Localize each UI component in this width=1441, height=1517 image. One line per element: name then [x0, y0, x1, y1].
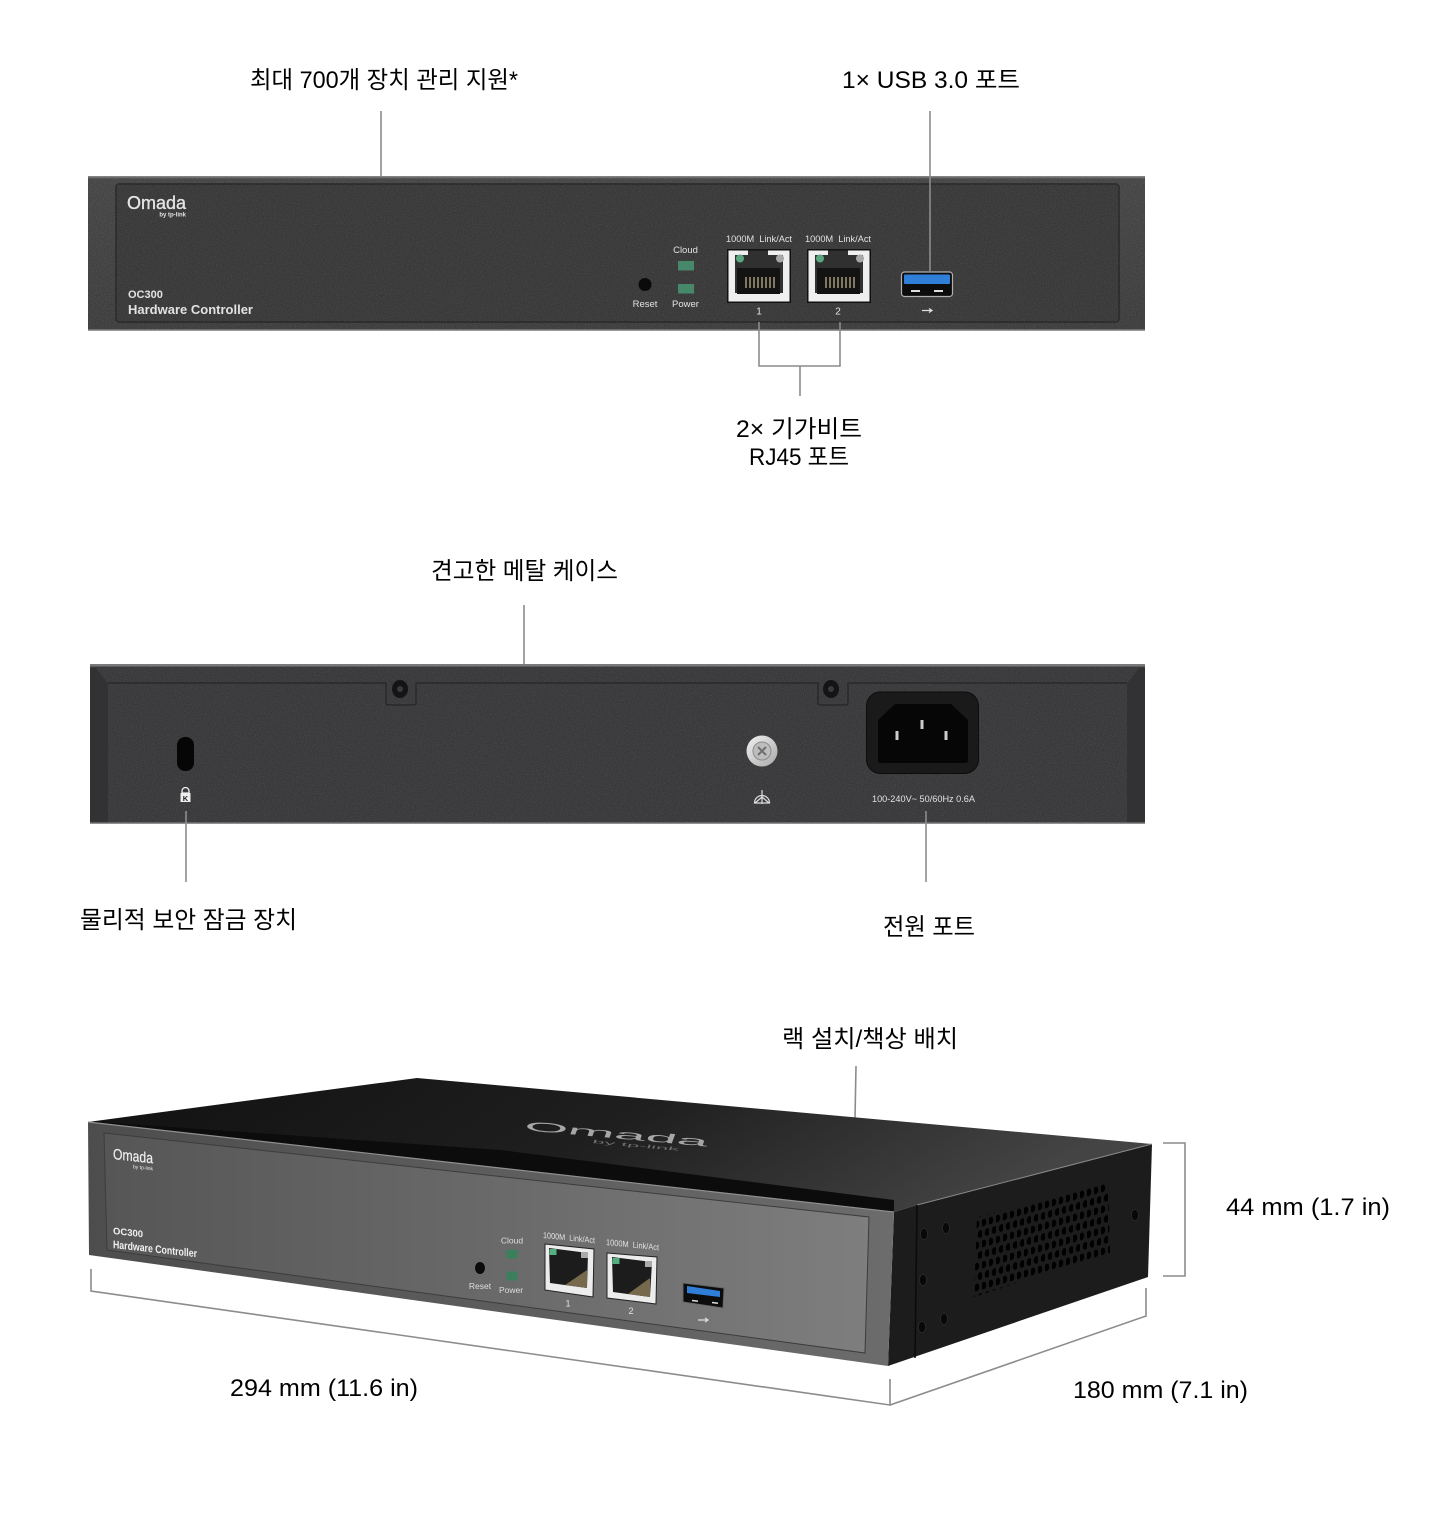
- leader line: power: [925, 811, 927, 882]
- reset button: Reset: [633, 299, 658, 310]
- top logo: by tp-link: [592, 1139, 680, 1152]
- label: gigabit RJ45 ports: [736, 416, 862, 471]
- reset and LEDs: Power: [499, 1285, 523, 1295]
- label: width: 294 mm (11.6 in): [230, 1375, 418, 1402]
- panel: front view device: [88, 176, 1145, 331]
- leader line: device management: [380, 111, 382, 176]
- logo and model text: by tp-link: [133, 1164, 153, 1172]
- logo and model text: Hardware Controller: [113, 1239, 198, 1260]
- label: USB port: 1× USB 3.0 포트: [842, 67, 1020, 94]
- label: gigabit RJ45 ports: 2× 기가비트: [736, 416, 862, 443]
- reset button: [633, 278, 658, 310]
- label: power port: 전원 포트: [883, 914, 975, 941]
- ventilation holes: [974, 1182, 1110, 1297]
- leader line: USB: [929, 111, 931, 271]
- leader line: mount: [855, 1066, 856, 1118]
- screw left: [392, 680, 408, 698]
- panel: rear view device: [90, 664, 1145, 824]
- RJ45 port 2: 1000M Link/Act: [606, 1237, 660, 1252]
- logo and model text: Omada: [113, 1146, 154, 1167]
- RJ45 port 2: 2: [835, 306, 841, 318]
- RJ45 port 2: [805, 234, 871, 318]
- reset and LEDs: Cloud: [501, 1236, 523, 1246]
- security lock slot: K: [183, 794, 189, 803]
- bracket: RJ45 ports: [759, 322, 840, 396]
- label: up to 700 devices: 최대 700개 장치 관리 지원*: [250, 67, 518, 94]
- label: depth: 180 mm (7.1 in): [1073, 1377, 1248, 1404]
- label: rack or desktop mount: 랙 설치/책상 배치: [782, 1026, 958, 1053]
- status LEDs: [672, 245, 699, 310]
- reset and LEDs: [469, 1236, 523, 1295]
- model name: Hardware Controller: [128, 303, 253, 317]
- top logo: Omada: [522, 1118, 711, 1149]
- bracket: width and depth dimension: [91, 1269, 1146, 1405]
- model name: [128, 289, 253, 317]
- status LEDs: Cloud: [673, 245, 698, 256]
- dark trim along front edge: [88, 1122, 894, 1212]
- power socket: [866, 692, 978, 805]
- USB 3.0 port: [902, 272, 952, 312]
- panel: perspective view device: [88, 1078, 1152, 1366]
- USB port: [683, 1283, 724, 1322]
- logo: Omada: by tp-link: [159, 212, 187, 218]
- RJ45 port 2: [606, 1237, 660, 1316]
- status LEDs: Power: [672, 299, 699, 310]
- RJ45 port 2: 1000M Link/Act: [805, 234, 871, 244]
- RJ45 port 1: 1: [756, 306, 762, 318]
- RJ45 port 1: 1000M Link/Act: [726, 234, 792, 244]
- label: gigabit RJ45 ports: RJ45 포트: [749, 444, 849, 471]
- bracket: height dimension: [1163, 1143, 1185, 1276]
- front bezel: [88, 1122, 894, 1366]
- RJ45 port 1: [543, 1230, 596, 1308]
- logo and model text: OC300: [113, 1226, 143, 1240]
- grounding screw: [746, 736, 778, 804]
- RJ45 port 1: 1: [565, 1298, 571, 1308]
- side screws: [918, 1210, 1138, 1332]
- side face: [888, 1144, 1152, 1366]
- RJ45 port 1: [726, 234, 792, 318]
- RJ45 port 2: 2: [628, 1306, 634, 1316]
- model name: OC300: [128, 289, 163, 301]
- logo and model text: [113, 1146, 198, 1260]
- leader line: lock: [185, 811, 187, 882]
- front panel: [104, 1133, 869, 1353]
- top face: [88, 1078, 1152, 1212]
- power socket: 100-240V~ 50/60Hz 0.6A: [872, 794, 976, 805]
- label: height: 44 mm (1.7 in): [1226, 1194, 1390, 1221]
- leader line: metal case: [523, 605, 525, 664]
- security lock slot: [177, 737, 194, 803]
- reset and LEDs: Reset: [469, 1281, 492, 1291]
- label: metal case: 견고한 메탈 케이스: [431, 558, 618, 585]
- screw right: [823, 680, 839, 698]
- logo: Omada: Omada: [127, 193, 187, 213]
- label: security lock: 물리적 보안 잠금 장치: [80, 907, 297, 934]
- RJ45 port 1: 1000M Link/Act: [543, 1230, 596, 1245]
